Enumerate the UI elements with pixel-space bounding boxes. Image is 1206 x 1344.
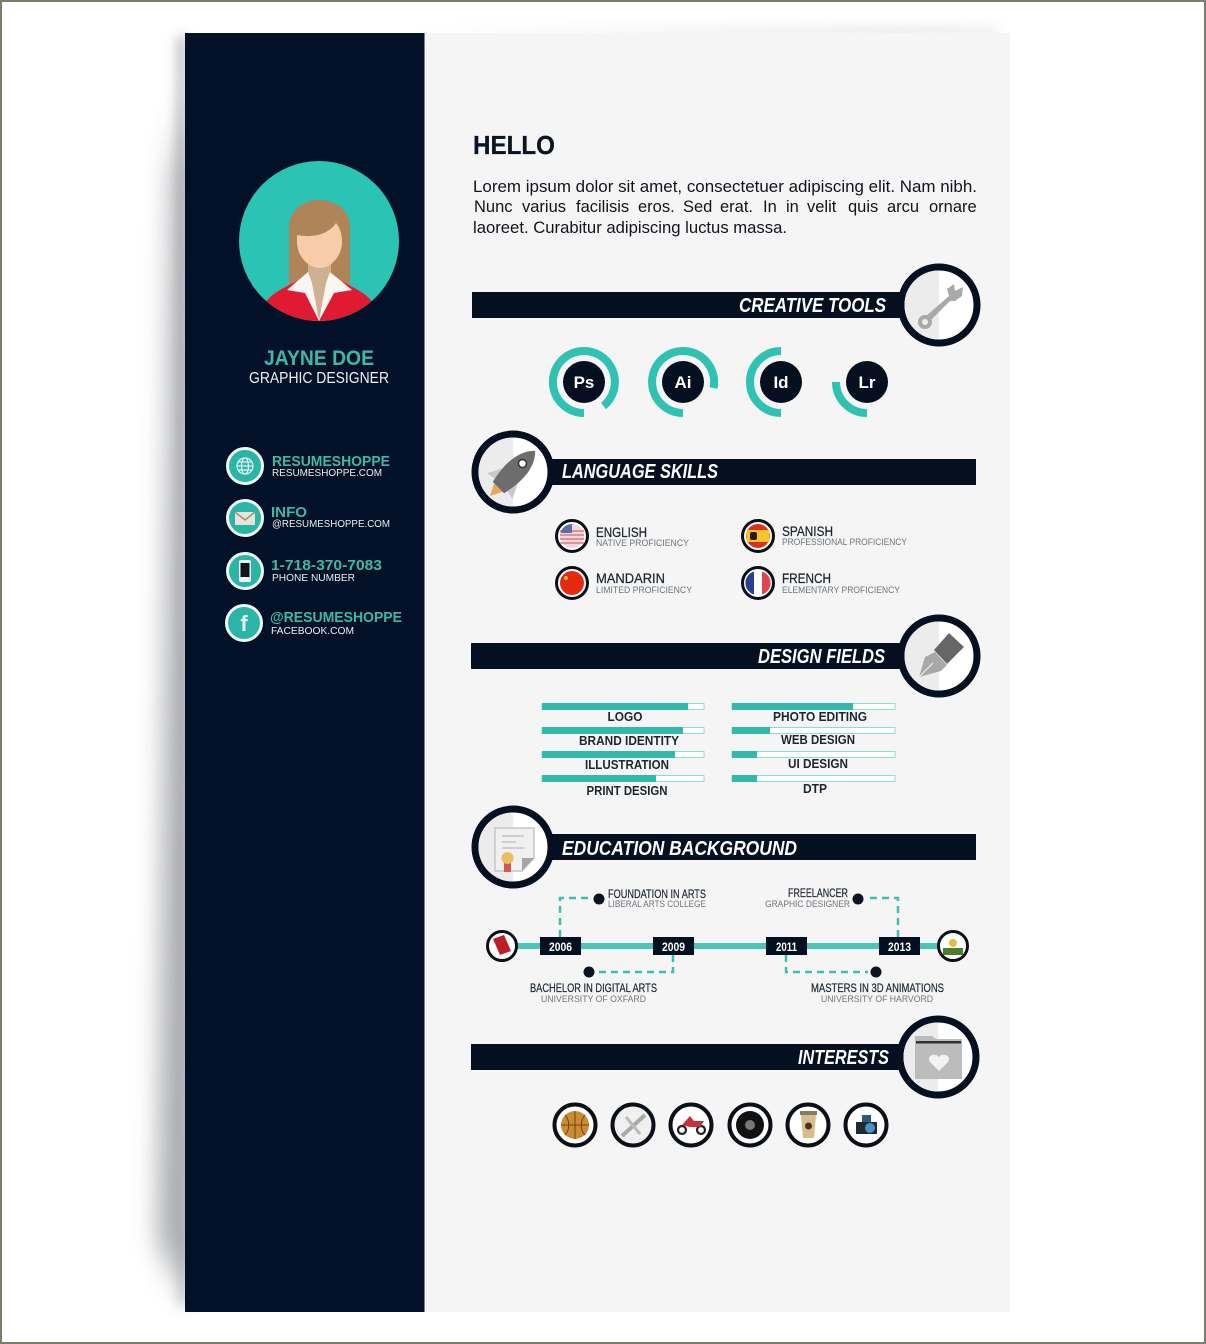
milestone: foundation in arts: LIBERAL ARTS COLLEGE [608, 899, 706, 909]
heading: hello: HELLO [473, 130, 555, 160]
year: 2011 [766, 937, 807, 955]
milestone: freelancer [765, 886, 864, 909]
intro paragraph: Nunc [474, 198, 513, 216]
section header: language skills [475, 434, 976, 510]
skill bars: left column [542, 703, 704, 798]
language: mandarin: LIMITED PROFICIENCY [596, 585, 692, 595]
intro paragraph: arcu [887, 198, 919, 216]
interest icons row [554, 1104, 886, 1146]
icon: envelope [235, 512, 255, 525]
software skill rings [553, 351, 888, 413]
bar: print design [542, 775, 704, 798]
language: spanish: PROFESSIONAL PROFICIENCY [782, 537, 907, 547]
panel: right content background [424, 33, 1010, 1312]
year: 2013 [879, 937, 920, 955]
intro paragraph: In [763, 198, 777, 216]
year: 2011: 2011 [776, 940, 797, 954]
ring: photoshop [553, 351, 615, 413]
section header: interests: INTERESTS [798, 1047, 890, 1069]
icon: rocket [477, 438, 548, 509]
milestone: foundation in arts: FOUNDATION IN ARTS [608, 887, 706, 901]
icon: US flag [560, 524, 584, 548]
contact: facebook: FACEBOOK.COM [271, 625, 354, 637]
contact: email: INFO [271, 504, 307, 521]
bar: illustration: ILLUSTRATION [585, 758, 669, 772]
intro paragraph: Sed [683, 198, 712, 216]
milestone: bachelor: UNIVERSITY OF OXFARD [541, 994, 646, 1004]
contact: facebook [226, 606, 402, 640]
contact: website: RESUMESHOPPE [272, 453, 390, 470]
interest: vinyl record [730, 1104, 770, 1146]
ring: indesign [750, 351, 802, 413]
profile avatar [239, 161, 399, 325]
icon: Spanish flag [746, 524, 770, 548]
bar: web design [732, 727, 895, 747]
skill bars: right column [732, 703, 895, 796]
education timeline [488, 886, 968, 1004]
intro paragraph: facilisis [576, 198, 629, 216]
contact: website [228, 448, 390, 484]
bar: web design: WEB DESIGN [781, 733, 855, 747]
milestone: bachelor [530, 966, 657, 1004]
contact: email [228, 500, 390, 536]
icon: French flag [745, 572, 771, 594]
intro paragraph: in [786, 198, 799, 216]
name: JAYNE DOE [264, 347, 374, 370]
icon: graduate [938, 932, 968, 960]
interest: motorcycle [670, 1104, 712, 1146]
year: 2009 [653, 937, 694, 955]
section header: language skills: LANGUAGE SKILLS [562, 461, 719, 483]
milestone: foundation in arts [594, 887, 706, 909]
section header: creative tools [472, 267, 977, 343]
interest: camera [846, 1104, 886, 1146]
ring: illustrator: Ai [674, 373, 692, 392]
language: mandarin [556, 568, 692, 598]
milestone: bachelor: BACHELOR IN DIGITAL ARTS [530, 981, 657, 995]
bar: brand identity: BRAND IDENTITY [579, 734, 680, 748]
bar: ui design [732, 751, 895, 771]
bar: photo editing [732, 703, 895, 724]
intro paragraph: ornare [929, 198, 977, 216]
language: english: ENGLISH [596, 524, 647, 540]
icon: wrench [918, 284, 963, 329]
language: french [742, 568, 900, 598]
language: english [556, 520, 689, 552]
language: mandarin: MANDARIN [596, 570, 665, 586]
bar: logo: LOGO [608, 710, 643, 724]
contact: email: @RESUMESHOPPE.COM [272, 518, 390, 530]
milestone: freelancer: GRAPHIC DESIGNER [765, 899, 850, 909]
icon: smartphone [239, 560, 251, 582]
icon: globe [237, 458, 253, 474]
panel: left sidebar [185, 33, 424, 1312]
ring: indesign: Id [773, 373, 789, 392]
section header: education background [475, 809, 976, 885]
icon: pen nib [919, 633, 964, 677]
contact: phone: 1-718-370-7083 [271, 557, 382, 574]
contact: website: RESUMESHOPPE.COM [272, 467, 382, 479]
icon: folder heart [915, 1036, 962, 1079]
interest: airplane [612, 1104, 654, 1146]
milestone: masters: MASTERS IN 3D ANIMATIONS [811, 981, 944, 995]
bar: photo editing: PHOTO EDITING [773, 710, 867, 724]
language: french: ELEMENTARY PROFICIENCY [782, 585, 900, 595]
icon: Chinese flag [560, 571, 584, 595]
ring: lightroom [836, 361, 888, 413]
contact: facebook: f [240, 611, 248, 636]
intro paragraph: quis [848, 198, 878, 216]
milestone: freelancer: FREELANCER [788, 886, 848, 900]
bar: print design: PRINT DESIGN [586, 784, 668, 798]
ring: photoshop: Ps [574, 373, 594, 392]
icon: certificate [495, 828, 534, 872]
section header: education background: EDUCATION BACKGROUND [562, 838, 797, 860]
year: 2013: 2013 [888, 940, 911, 954]
intro paragraph: eros. [638, 198, 675, 216]
language: french: FRENCH [782, 570, 831, 586]
bar: dtp: DTP [803, 782, 827, 796]
bar: illustration [542, 751, 704, 772]
milestone: masters [811, 966, 944, 1004]
year: 2006 [540, 937, 581, 955]
year: 2009: 2009 [662, 940, 685, 954]
contact: phone [228, 554, 382, 588]
contact: facebook: @RESUMESHOPPE [270, 609, 402, 626]
year: 2006: 2006 [549, 940, 572, 954]
section header: design fields: DESIGN FIELDS [758, 646, 886, 668]
milestone: masters: UNIVERSITY OF HARVORD [821, 994, 933, 1004]
intro paragraph: varius [522, 198, 566, 216]
intro paragraph: laoreet. Curabitur adipiscing luctus massa. [473, 218, 787, 237]
ring: illustrator [652, 351, 714, 413]
bar: dtp [732, 775, 895, 796]
section header: creative tools: CREATIVE TOOLS [739, 295, 887, 317]
language: spanish [742, 520, 907, 552]
intro paragraph: Lorem ipsum dolor sit amet, consectetuer adipiscing elit. Nam nibh. [473, 177, 977, 196]
language: english: NATIVE PROFICIENCY [596, 538, 689, 548]
intro paragraph: velit [807, 198, 837, 216]
icon: book [488, 932, 516, 960]
section header: design fields [471, 618, 977, 694]
intro paragraph [473, 177, 977, 237]
bar: logo [542, 703, 704, 724]
bar: brand identity [542, 727, 704, 748]
bar: ui design: UI DESIGN [788, 757, 848, 771]
interest: basketball [554, 1104, 596, 1146]
language: spanish: SPANISH [782, 523, 833, 539]
job title: GRAPHIC DESIGNER [249, 370, 389, 387]
section header: interests [471, 1019, 976, 1095]
intro paragraph: erat. [720, 198, 753, 216]
contact: phone: PHONE NUMBER [272, 572, 355, 584]
interest: coffee cup [788, 1104, 828, 1146]
ring: lightroom: Lr [858, 373, 876, 392]
